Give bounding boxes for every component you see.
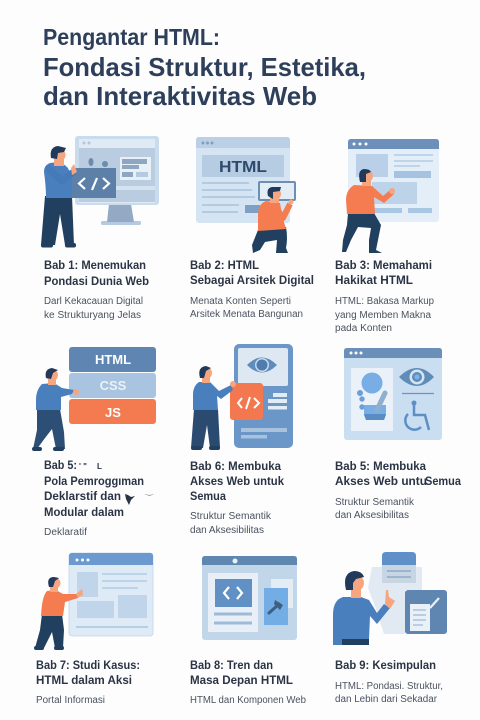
- icon: portal layout with person: [34, 553, 153, 650]
- text block: Deklaratif: [44, 527, 87, 538]
- icon: person with documents: [333, 552, 447, 645]
- panel: bab 6: [190, 344, 293, 536]
- panel: bab 5 akses: [335, 348, 461, 521]
- text block: Struktur Semantik: [190, 511, 272, 522]
- heading: [335, 459, 461, 488]
- panel: bab 7: [34, 553, 153, 706]
- heading: [44, 458, 154, 519]
- text block: [190, 511, 272, 536]
- heading: Bab 3: Memahami: [335, 258, 432, 272]
- heading: Masa Depan HTML: [190, 673, 293, 687]
- heading: Bab 8: Tren dan: [190, 658, 273, 672]
- icon: mobile screen with eye and person: [191, 344, 293, 450]
- heading: Hakikat HTML: [335, 273, 413, 287]
- title: Pengantar HTML:: [43, 24, 220, 50]
- heading: HTML dalam Aksi: [36, 673, 132, 687]
- text block: dan Lebin dari Sekadar: [335, 694, 438, 705]
- icon: browser window with person: [342, 139, 439, 253]
- text block: HTML: Pondasi. Struktur,: [335, 681, 443, 692]
- heading: Modular dalam: [44, 505, 124, 519]
- heading: Bab 2: HTML: [190, 258, 259, 272]
- heading: Akses Web untu: [335, 474, 427, 488]
- heading: Sebagai Arsitek Digital: [190, 273, 314, 287]
- heading: [36, 658, 140, 687]
- heading: [190, 258, 314, 287]
- heading: Bab 5:: [44, 458, 77, 472]
- text block: pada Konten: [335, 323, 392, 334]
- icon: html css js stack with person: [32, 347, 156, 451]
- text block: Struktur Semantik: [335, 497, 415, 508]
- title: dan Interaktivitas Web: [43, 81, 317, 111]
- text block: dan Aksesibilitas: [335, 510, 409, 521]
- title: [43, 24, 366, 111]
- text block: Darl Kekacauan Digital: [44, 296, 143, 307]
- heading: Bab 6: Membuka: [190, 459, 281, 473]
- icon: html layout with architect: [196, 137, 295, 253]
- panel: bab 8: [190, 556, 306, 706]
- text block: ke Strukturyang Jelas: [44, 310, 141, 321]
- text block: Arsitek Menata Bangunan: [190, 309, 303, 320]
- heading: [335, 258, 432, 287]
- text block: HTML: Bakasa Markup: [335, 296, 434, 307]
- panel: bab 1: [41, 136, 159, 321]
- text block: [44, 296, 143, 321]
- text block: [335, 681, 443, 705]
- heading: Bab 5: Membuka: [335, 459, 426, 473]
- heading: Deklarstif dan: [44, 489, 121, 503]
- panel: bab 2: [190, 137, 314, 320]
- text block: HTML dan Komponen Web: [190, 695, 306, 706]
- icon: html css js stack with person: HTML: [95, 352, 131, 367]
- heading: Semua: [190, 489, 226, 503]
- heading: Bab 7: Studi Kasus:: [36, 658, 140, 672]
- text block: [335, 296, 434, 334]
- heading: Semua: [425, 474, 461, 488]
- heading: L: [97, 462, 102, 471]
- icon: html css js stack with person: JS: [105, 405, 121, 420]
- panel: bab 9: [333, 552, 447, 705]
- text block: Menata Konten Seperti: [190, 296, 291, 307]
- heading: Pondasi Dunia Web: [44, 274, 149, 288]
- heading: [44, 258, 149, 288]
- heading: ' ": [79, 462, 87, 471]
- heading: [190, 459, 284, 503]
- icon: monitor with developer: [41, 136, 159, 248]
- heading: Bab 9: Kesimpulan: [335, 658, 436, 672]
- text block: dan Aksesibilitas: [190, 525, 264, 536]
- icon: html layout with architect: HTML: [219, 159, 267, 176]
- text block: yang Memben Makna: [335, 310, 431, 321]
- text block: [190, 296, 303, 320]
- text block: [335, 497, 415, 521]
- icon: web component window with hammer: [202, 556, 297, 640]
- icon: accessibility window: [344, 348, 442, 440]
- heading: Pola Pemroggıman: [44, 474, 144, 488]
- text block: Portal Informasi: [36, 695, 105, 706]
- panel: bab 5 pola: [32, 347, 156, 538]
- title: Fondasi Struktur, Estetika,: [43, 52, 366, 82]
- icon: html css js stack with person: CSS: [100, 378, 127, 393]
- heading: Bab 1: Menemukan: [44, 258, 146, 272]
- panel: bab 3: [335, 139, 439, 334]
- heading: [190, 658, 293, 687]
- heading: Akses Web untuk: [190, 474, 284, 488]
